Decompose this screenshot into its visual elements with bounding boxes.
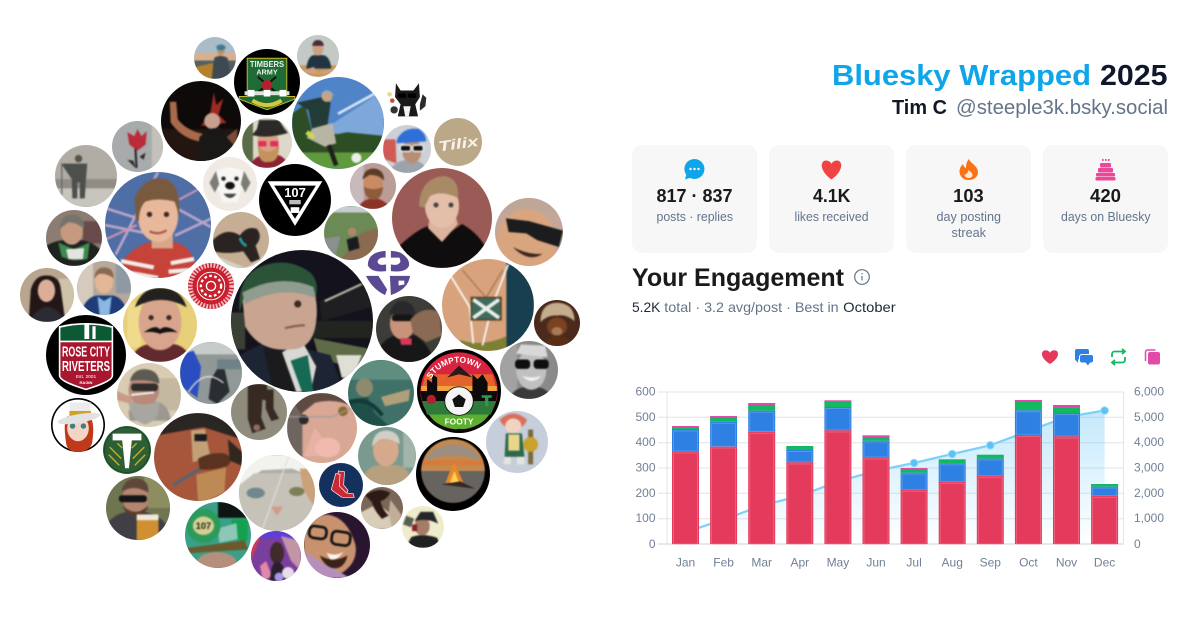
- month labels: May: [827, 556, 849, 570]
- chart legend icons: [1042, 349, 1160, 366]
- avatar: 107 triangle logo: 107: [284, 185, 306, 200]
- month labels: Jul: [906, 556, 922, 570]
- bar: Jul: [901, 468, 928, 544]
- avatar: woman with dark hair: [20, 268, 74, 322]
- engagement summary: total · 3.2 avg/post · Best in: [664, 299, 839, 315]
- icon: quotes: [1146, 350, 1160, 364]
- avatar: mountain photographer: [194, 37, 236, 79]
- avatar: close-up face with glasses: [287, 393, 357, 463]
- avatar: 107 triangle logo: [259, 164, 331, 236]
- title: Bluesky Wrapped: [832, 60, 1091, 92]
- avatar: fans in green: [348, 360, 414, 426]
- bar: Oct: [1015, 400, 1042, 544]
- user name and handle: Tim C: [892, 97, 947, 119]
- card: posting streak: 103: [953, 186, 984, 206]
- month labels: Oct: [1019, 556, 1038, 570]
- avatar: Rose City Riveters logo: RAGIN: [80, 380, 93, 385]
- avatar: Timbers Army logo: TIMBERS: [250, 60, 284, 69]
- avatar: beach figure: [55, 145, 117, 207]
- card: days on Bluesky: 420: [1090, 186, 1121, 206]
- avatar: Stumptown Footy badge: [417, 349, 501, 433]
- month labels: Sep: [980, 556, 1001, 570]
- card: posting streak: [906, 145, 1031, 253]
- month labels: [676, 556, 1115, 570]
- avatar: purple geometric logo: [364, 249, 412, 297]
- right column: [632, 60, 1168, 570]
- avatar: cartoon woman in white hat: [51, 398, 105, 452]
- bar: May: [824, 400, 851, 544]
- avatar: golden retriever sketch: [203, 157, 257, 211]
- heading: Your Engagement: Your Engagement: [632, 264, 845, 292]
- avatar: man with green scarf: [46, 210, 102, 266]
- avatar: sepia portrait: [361, 487, 403, 529]
- avatar: grey cat: [239, 455, 315, 531]
- avatar: Tilix logo: Tilix: [437, 134, 481, 155]
- avatar: orangutan: [534, 300, 580, 346]
- engagement summary: October: [843, 299, 896, 315]
- cumulative line: [686, 410, 1105, 532]
- month labels: Nov: [1056, 556, 1077, 570]
- panel: stat cards: [632, 145, 1168, 253]
- user name and handle: @steeple3k.bsky.social: [956, 97, 1168, 119]
- icon: likes: [1042, 350, 1058, 364]
- icon: replies: [1075, 349, 1093, 366]
- right axis labels: 2,000: [1134, 486, 1164, 500]
- card: posts and replies: 817 · 837: [656, 186, 732, 206]
- right axis labels: [1134, 384, 1164, 551]
- card: likes received: [769, 145, 894, 253]
- avatar: hiker on stairs: [324, 206, 378, 260]
- right axis labels: 5,000: [1134, 410, 1164, 424]
- icon: info: [855, 270, 869, 284]
- avatar: man with moustache: [123, 288, 197, 362]
- icon: reposts: [1112, 349, 1125, 365]
- avatar: Timbers Army logo: ARMY: [256, 68, 278, 77]
- month labels: Aug: [942, 556, 963, 570]
- avatar: chocolate labrador: [213, 212, 269, 268]
- avatar: beach bonfire: [416, 437, 490, 511]
- avatar: Red Sox logo: [319, 463, 363, 507]
- avatar: cartoon wrestler character: [486, 411, 548, 473]
- avatar: hat with 107 badge: 107: [196, 521, 211, 531]
- avatar: hat with 107 badge: [185, 502, 251, 568]
- left axis labels: 200: [635, 486, 656, 500]
- avatar: man in black hat and red glasses: [242, 118, 292, 168]
- card: posting streak: streak: [952, 225, 986, 240]
- avatar: man kissed by dog: [376, 296, 442, 362]
- avatar cluster: [20, 35, 580, 581]
- bar: Jun: [862, 435, 890, 544]
- avatar: punk with mohawk: [161, 81, 241, 161]
- card: likes received: 4.1K: [813, 186, 850, 206]
- bar: Aug: [939, 459, 966, 544]
- avatar: man with beer: [106, 476, 170, 540]
- avatar: man at table: [297, 35, 339, 77]
- left axis labels: 0: [649, 537, 656, 551]
- engagement summary: 5.2K: [632, 299, 661, 315]
- avatar: older man smiling: [358, 427, 416, 485]
- avatar: blue jersey crowd: [180, 342, 242, 404]
- chart grid and axes: [658, 392, 1124, 544]
- engagement summary: [632, 299, 896, 315]
- avatar: cat paws: [231, 384, 287, 440]
- avatar: woman with blonde hair: [392, 168, 492, 268]
- avatar: woman in black sunglasses: [495, 198, 563, 266]
- avatar: Tilix logo: [434, 118, 482, 166]
- card: posts and replies: [632, 145, 757, 253]
- cumulative points: [910, 407, 1108, 467]
- avatar: Portland Thorns logo: [188, 263, 234, 309]
- avatar: rose stencil: [112, 121, 163, 172]
- card: days on Bluesky: days on Bluesky: [1061, 209, 1151, 224]
- avatar: Stumptown Footy badge: STUMPTOWN: [426, 356, 482, 378]
- avatar: black and white man in crown: [500, 341, 558, 399]
- avatar: school photo of boy: [105, 172, 211, 278]
- avatar: Timbers Army logo: [234, 49, 300, 115]
- card: posts and replies: posts · replies: [656, 209, 733, 224]
- avatar: man in blue jacket: [77, 261, 131, 315]
- bar: Feb: [710, 416, 737, 544]
- right axis labels: 1,000: [1134, 511, 1164, 525]
- combo chart: [635, 384, 1164, 570]
- bar: Dec: [1091, 484, 1118, 544]
- bar: Apr: [786, 446, 813, 544]
- avatar: Portland Timbers axe logo: [103, 426, 151, 474]
- right axis labels: 6,000: [1134, 384, 1164, 398]
- bar: Nov: [1053, 405, 1080, 544]
- month labels: Jun: [866, 556, 886, 570]
- month labels: Mar: [751, 556, 772, 570]
- avatar: pendant necklace: [442, 259, 534, 351]
- bar: Mar: [748, 403, 775, 544]
- right axis labels: 3,000: [1134, 460, 1164, 474]
- avatar: man with beard: [350, 163, 396, 209]
- left axis labels: 400: [635, 435, 656, 449]
- month labels: Jan: [676, 556, 695, 570]
- month labels: Feb: [713, 556, 734, 570]
- left axis labels: 500: [635, 410, 656, 424]
- card: days on Bluesky: [1043, 145, 1168, 253]
- month labels: Apr: [790, 556, 809, 570]
- card: likes received: likes received: [794, 209, 868, 224]
- month labels: Dec: [1094, 556, 1115, 570]
- avatar: French bulldog with sunglasses: [384, 74, 430, 120]
- avatar: Rose City Riveters logo: [46, 315, 126, 395]
- left axis labels: 100: [635, 511, 656, 525]
- left axis labels: 300: [635, 460, 656, 474]
- left axis labels: [635, 384, 656, 551]
- avatar: man in blue cap: [383, 125, 431, 173]
- title: 2025: [1100, 60, 1168, 92]
- right axis labels: 0: [1134, 537, 1141, 551]
- avatar: Rose City Riveters logo: Est. 2001: [76, 374, 96, 380]
- avatar: man among purple balloons: [251, 531, 301, 581]
- card: posting streak: day posting: [936, 209, 1001, 224]
- avatar: smiling man with glasses: [304, 512, 370, 578]
- avatar: bearded man with cigar: [117, 363, 181, 427]
- avatar: central large selfie in stadium: [231, 250, 373, 392]
- avatar: violin on rug: [154, 413, 242, 501]
- avatar: soccer kicker: [292, 77, 384, 169]
- right axis labels: 4,000: [1134, 435, 1164, 449]
- bar: Sep: [977, 455, 1004, 544]
- left axis labels: 600: [635, 384, 656, 398]
- cumulative area: [686, 410, 1105, 544]
- avatar: Stumptown Footy badge: FOOTY: [445, 417, 474, 427]
- bar: Jan: [672, 426, 699, 544]
- avatar: man in hat drinking: [402, 506, 444, 548]
